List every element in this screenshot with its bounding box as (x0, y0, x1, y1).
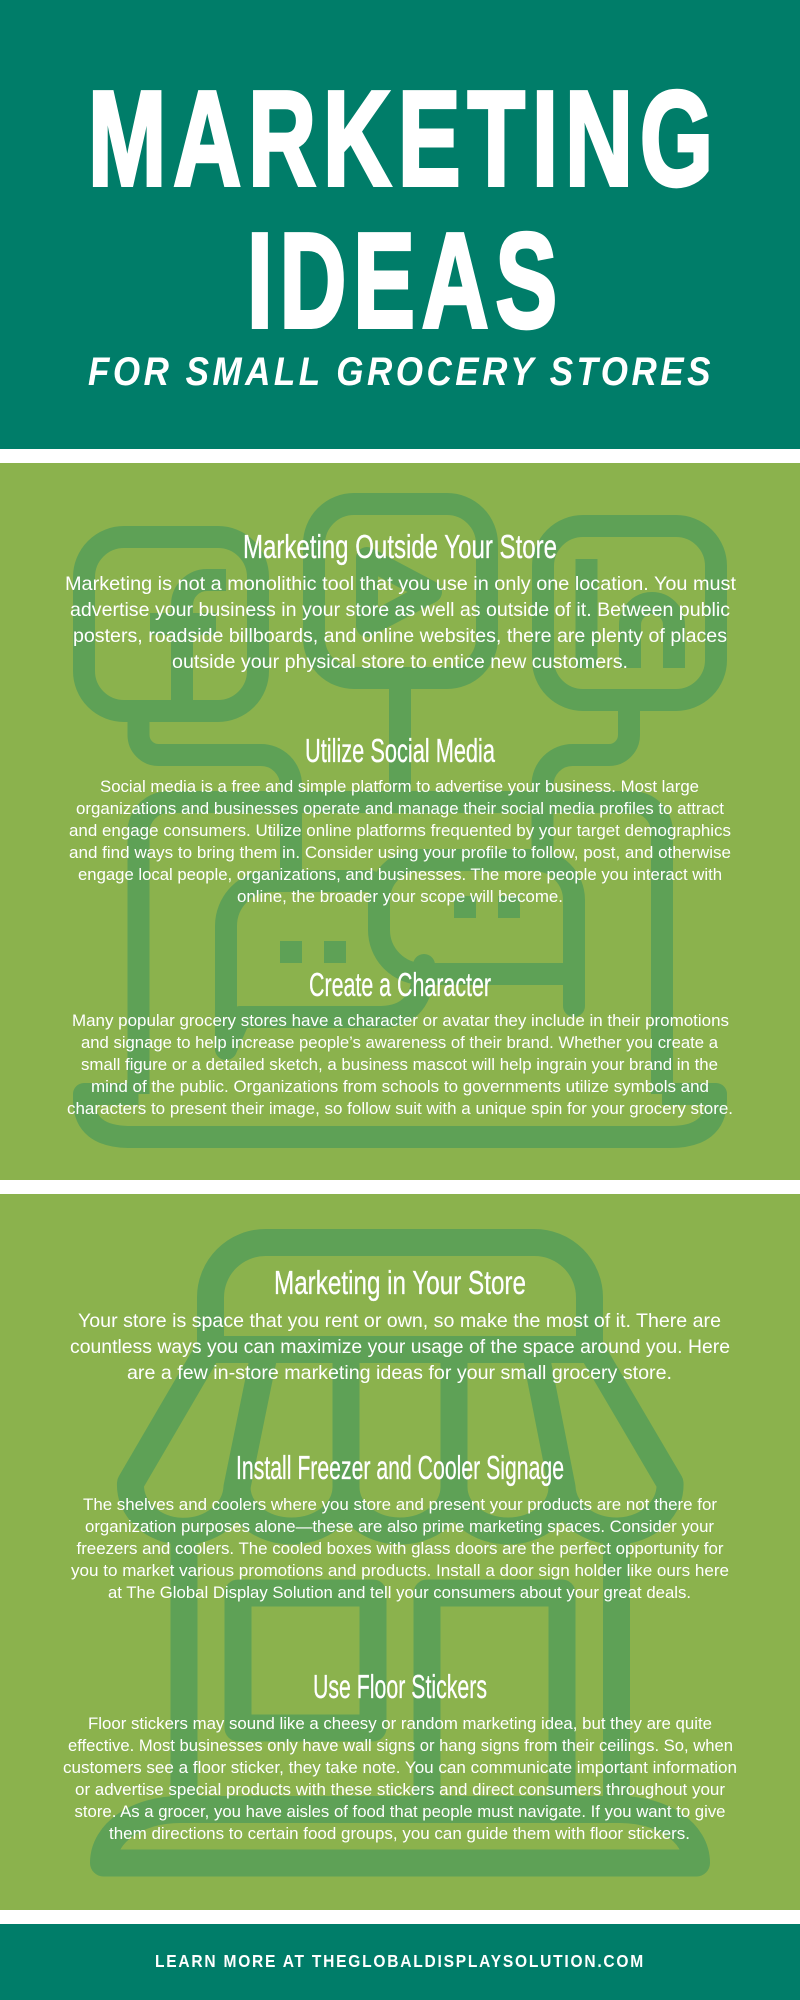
text block: marketing outside intro: posters, roadside billboards, and online websites, there are plenty of places (73, 625, 727, 647)
text block: marketing outside intro: Marketing is not a monolithic tool that you use in only one location. You must (65, 573, 737, 595)
text block: utilize social media: engage local people, organizations, and businesses. The more people you interact with (78, 866, 722, 884)
text block: marketing in store intro (70, 1310, 730, 1384)
panel: marketing in your store (0, 1194, 800, 1910)
text block: use floor stickers: store. As a grocer, you have aisles of food that people must navigate. If you want to give (74, 1803, 726, 1821)
text block: marketing in store intro: countless ways you can maximize your usage of the space around you. Here (70, 1336, 730, 1358)
title (88, 63, 720, 356)
text block: use floor stickers: them directions to certain food groups, you can guide them with floor stickers. (109, 1825, 690, 1843)
text block: install freezer and cooler signage: The shelves and coolers where you store and present your products are not there for (83, 1496, 718, 1514)
text block: install freezer and cooler signage (71, 1496, 729, 1602)
panel: marketing outside your store (0, 463, 800, 1180)
heading: create a character: Create a Character (309, 966, 491, 1003)
text block: use floor stickers (63, 1715, 737, 1843)
text block: install freezer and cooler signage: you to market various promotions and products. Install a door sign holder like ours here (71, 1562, 729, 1580)
text block: utilize social media: organizations and businesses operate and manage their social media profiles to attract (76, 800, 724, 818)
heading: install freezer and cooler signage: Install Freezer and Cooler Signage (236, 1449, 564, 1486)
text block: use floor stickers: effective. Most businesses only have wall signs or hang signs from their ceilings. So, when (68, 1737, 733, 1755)
text block: create a character: Many popular grocery stores have a character or avatar they include in their promotions (72, 1012, 729, 1030)
text block: create a character: characters to present their image, so follow suit with a unique spin for your grocery store. (67, 1100, 733, 1118)
text block: create a character: and signage to help increase people’s awareness of their brand. Whether you create a (81, 1034, 719, 1052)
icon: storefront with awning (104, 1242, 696, 1863)
icon: laptop with social media bubbles (84, 504, 716, 1137)
text block: use floor stickers: Floor stickers may sound like a cheesy or random marketing idea, but they are quite (88, 1715, 712, 1733)
panel: header banner (0, 0, 800, 449)
heading: marketing in your store: Marketing in Your Store (274, 1264, 526, 1301)
text block: install freezer and cooler signage: organization purposes alone—these are also prime marketing spaces. Consider your (85, 1518, 715, 1536)
text block: utilize social media: online, the broader your scope will become. (237, 888, 563, 906)
heading: utilize social media: Utilize Social Media (305, 732, 495, 769)
text block: install freezer and cooler signage: freezers and coolers. The cooled boxes with glass doors are the perfect opportunity for (76, 1540, 724, 1558)
text block: create a character: small figure or a detailed sketch, a business mascot will help ingrain your brand in the (81, 1056, 718, 1074)
panel: footer banner (0, 1924, 800, 2000)
text block: marketing in store intro: Your store is space that you rent or own, so make the most of it. There are (78, 1310, 721, 1332)
heading: use floor stickers: Use Floor Stickers (313, 1668, 487, 1705)
text block: marketing in store intro: are a few in-store marketing ideas for your small grocery store. (127, 1362, 672, 1384)
text block: create a character (67, 1012, 733, 1118)
text block: marketing outside intro: advertise your business in your store as well as outside of it. Between public (70, 599, 730, 621)
text block: utilize social media: and engage consumers. Utilize online platforms frequented by your target demographics (69, 822, 731, 840)
footer call to action: LEARN MORE AT THEGLOBALDISPLAYSOLUTION.COM (155, 1951, 645, 1971)
text block: marketing outside intro: outside your physical store to entice new customers. (172, 651, 628, 673)
title: IDEAS (247, 205, 564, 356)
text block: install freezer and cooler signage: at The Global Display Solution and tell your consumers about your great deals. (108, 1584, 691, 1602)
heading: marketing outside your store: Marketing Outside Your Store (243, 528, 557, 565)
text block: marketing outside intro (65, 573, 737, 673)
text block: use floor stickers: customers see a floor sticker, they take note. You can communicate important information (63, 1759, 737, 1777)
text block: create a character: mind of the public. Organizations from schools to governments utilize symbols and (91, 1078, 709, 1096)
subtitle: FOR SMALL GROCERY STORES (88, 350, 714, 394)
text block: utilize social media: and find ways to bring them in. Consider using your profile to follow, post, and otherwise (69, 844, 731, 862)
text block: utilize social media: Social media is a free and simple platform to advertise your business. Most large (100, 778, 699, 796)
text block: use floor stickers: or advertise special products with these stickers and direct consumers throughout your (75, 1781, 726, 1799)
text block: utilize social media (69, 778, 731, 906)
